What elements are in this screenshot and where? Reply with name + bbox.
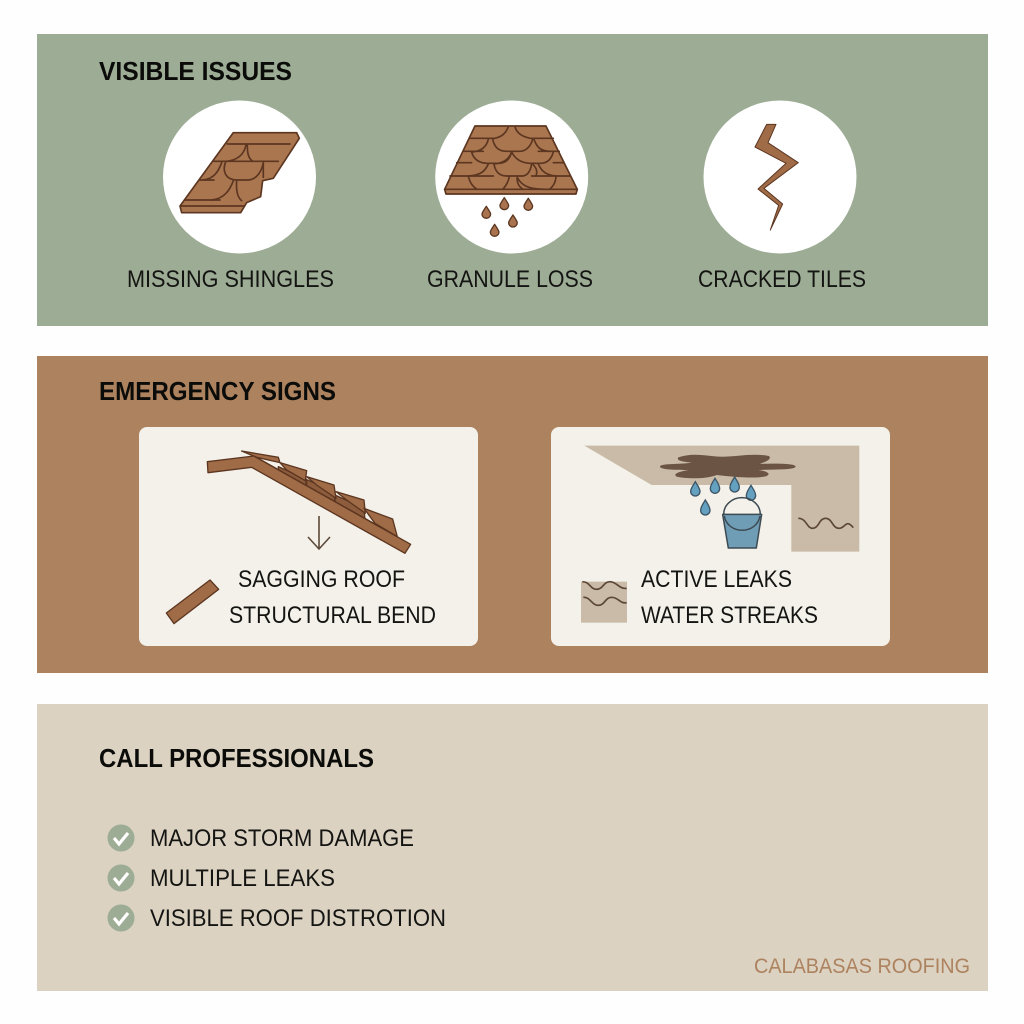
label: granule loss: GRANULE LOSS <box>427 266 593 293</box>
card: active leaks <box>551 427 890 646</box>
icon: missing shingles <box>163 100 316 254</box>
icon: water streaks swatch <box>581 582 627 623</box>
label: active leaks: ACTIVE LEAKS <box>641 566 792 593</box>
checklist item: major storm damage: MAJOR STORM DAMAGE <box>150 825 414 852</box>
label: cracked tiles: CRACKED TILES <box>698 266 866 293</box>
label: water streaks: WATER STREAKS <box>641 602 818 629</box>
heading: emergency signs: EMERGENCY SIGNS <box>99 376 336 406</box>
icon: down arrow <box>308 516 330 549</box>
label: sagging roof: SAGGING ROOF <box>238 566 405 593</box>
panel: visible issues <box>37 34 988 326</box>
label: missing shingles: MISSING SHINGLES <box>127 266 334 293</box>
card: sagging roof <box>139 427 478 646</box>
checklist item: multiple leaks: MULTIPLE LEAKS <box>150 865 335 892</box>
heading: visible issues: VISIBLE ISSUES <box>99 56 292 86</box>
panel: emergency signs <box>37 356 988 673</box>
icon: loose plank <box>166 580 219 624</box>
panel: call professionals <box>37 704 988 991</box>
icon: sagging roof beam <box>207 451 411 553</box>
brand label: CALABASAS ROOFING <box>754 955 970 978</box>
checklist item: visible roof distortion: VISIBLE ROOF DISTROTION <box>150 905 446 932</box>
heading: call professionals: CALL PROFESSIONALS <box>99 743 374 773</box>
icon: cracked tiles <box>704 100 856 254</box>
label: structural bend: STRUCTURAL BEND <box>229 602 436 629</box>
icon: granule loss <box>435 100 588 254</box>
icon: ceiling stain and bucket <box>584 446 859 552</box>
